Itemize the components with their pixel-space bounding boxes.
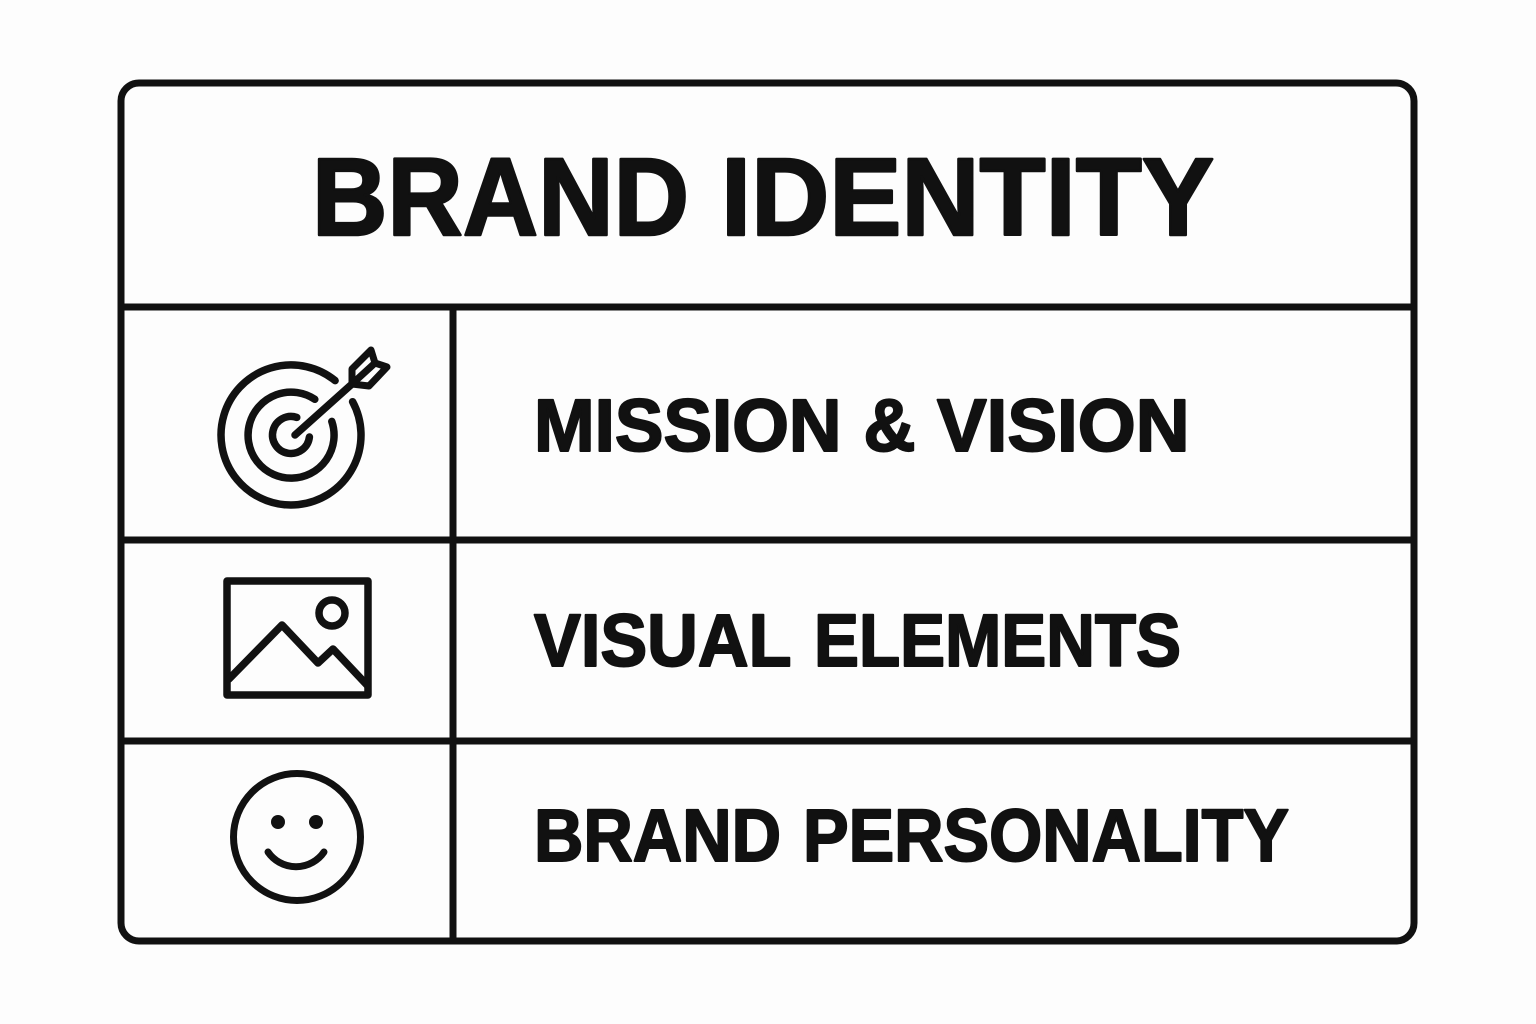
label: mission and vision: MISSION (534, 384, 842, 467)
title (312, 136, 1214, 259)
icon: smiley face (234, 774, 360, 900)
label: visual elements: ELEMENTS (814, 599, 1181, 682)
label: brand personality: BRAND (534, 794, 781, 877)
label: mission and vision (534, 384, 1190, 467)
title: IDENTITY (721, 136, 1214, 259)
label: brand personality (534, 794, 1289, 877)
icon: target with arrow (221, 350, 387, 505)
label: brand personality: PERSONALITY (803, 794, 1289, 877)
icon: picture with mountains (227, 581, 368, 695)
title: BRAND (312, 136, 689, 259)
label: mission and vision: VISION (937, 384, 1190, 467)
label: visual elements: VISUAL (534, 599, 792, 682)
panel: outer frame and table grid (121, 83, 1414, 941)
label: mission and vision: & (864, 384, 916, 467)
label: visual elements (534, 599, 1181, 682)
